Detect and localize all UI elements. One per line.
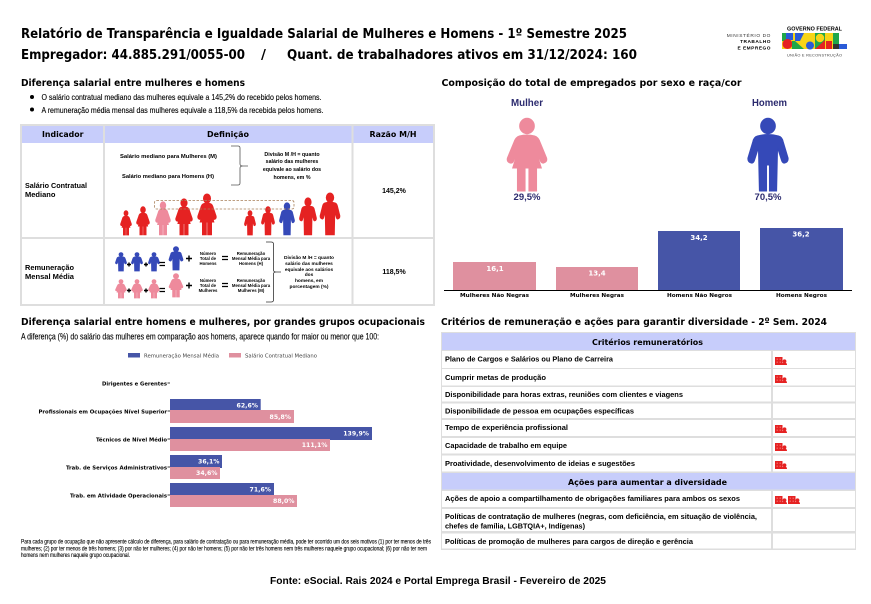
title: Quant. de trabalhadores ativos em 31/12/2024: 160 xyxy=(287,47,637,63)
table: indicadores: Remuneração xyxy=(25,263,74,272)
table: indicadores: Mediano xyxy=(25,190,56,199)
table: critérios e ações: Capacidade de trabalho em equipe xyxy=(445,441,567,450)
definition: remuneração média: salário das mulheres xyxy=(285,261,333,267)
heading: diferença salarial: Diferença salarial entre mulheres e homens xyxy=(21,78,245,89)
source: Fonte: eSocial. Rais 2024 e Portal Emprega Brasil - Fevereiro de 2025 xyxy=(270,575,606,587)
bar chart: sexo e raça/cor: Mulheres Negras xyxy=(570,293,625,299)
subtitle: A diferença (%) do salário das mulheres em comparação aos homens, aparece quando for maior ou menor que 100: xyxy=(21,332,379,342)
bar chart: sexo e raça/cor: 13,4 xyxy=(588,270,606,278)
definition: remuneração média: Mulheres (M) xyxy=(238,288,265,293)
table: critérios e ações: Ações de apoio a compartilhamento de obrigações familiares para ambos os sexos xyxy=(445,494,740,503)
definition: salário mediano: Salário mediano para Homens (H) xyxy=(122,174,214,180)
definition: remuneração média: Mulheres xyxy=(199,288,218,293)
table: critérios e ações: Políticas de promoção de mulheres para cargos de direção e gerência xyxy=(445,537,694,546)
definition: remuneração média: Número xyxy=(200,278,216,283)
logo: ministério e governo federal: MINISTÉRIO DO xyxy=(727,32,771,39)
legend: Remuneração Mensal Média xyxy=(144,352,219,360)
table: indicadores: 145,2% xyxy=(382,188,407,195)
legend xyxy=(128,352,318,360)
bar chart: sexo e raça/cor: Mulheres Não Negras xyxy=(460,293,530,299)
bar chart: sexo e raça/cor: Homens Não Negros xyxy=(667,293,733,299)
heading: critérios: Critérios de remuneração e ações para garantir diversidade - 2º Sem. 2024 xyxy=(441,316,827,328)
footnote: Para cada grupo de ocupação que não apresente cálculo de diferença, para salário de contratação ou para remuneração média, pode ter ocorrido um dos seis motivos (1) por ter menos de três xyxy=(21,540,431,546)
table: critérios e ações: Tempo de experiência profissional xyxy=(445,423,568,432)
bar chart: sexo e raça/cor: Homens Negros xyxy=(776,293,828,299)
title: Relatório de Transparência e Igualdade Salarial de Mulheres e Homens - 1º Semestre 2025 xyxy=(21,26,627,42)
definition: remuneração média: Homens xyxy=(200,261,217,266)
logo: ministério e governo federal: E EMPREGO xyxy=(737,46,771,52)
bar chart: grupos ocupacionais: 85,8% xyxy=(270,414,291,421)
definition: remuneração média: homens, em xyxy=(295,278,323,284)
logo: ministério e governo federal: UNIÃO E RECONSTRUÇÃO xyxy=(787,52,842,58)
icons: mulheres e homens em ordem de salário xyxy=(121,193,340,235)
table: critérios e ações: Proatividade, desenvolvimento de ideias e sugestões xyxy=(445,459,635,468)
legend: Salário Contratual Mediano xyxy=(245,352,318,360)
icons: empresa com critério adotado xyxy=(775,357,800,504)
icon: homem 70,5%: Homem xyxy=(752,98,787,109)
bar chart: grupos ocupacionais: 36,1% xyxy=(198,458,220,466)
table: indicadores xyxy=(20,124,435,306)
table: critérios e ações: Disponibilidade de pessoa em ocupações específicas xyxy=(445,406,634,416)
bar chart: grupos ocupacionais: 139,9% xyxy=(343,430,369,438)
definition: remuneração média: Total de xyxy=(200,283,217,288)
bar chart: grupos ocupacionais: 71,6% xyxy=(250,486,271,494)
logo: ministério e governo federal xyxy=(727,26,847,58)
table: indicadores: Salário Contratual xyxy=(25,181,87,190)
table: critérios e ações: Ações para aumentar a diversidade xyxy=(568,478,728,487)
bar chart: sexo e raça/cor: 34,2 xyxy=(690,234,708,242)
footnote xyxy=(21,540,431,559)
table: critérios e ações: Cumprir metas de produção xyxy=(445,373,547,382)
table: critérios e ações: chefes de família, LGBTQIA+, Indígenas) xyxy=(445,522,586,530)
table: indicadores: Razão M/H xyxy=(370,130,416,139)
table: critérios e ações: Plano de Cargos e Salários ou Plano de Carreira xyxy=(445,354,614,364)
icon: homem 70,5% xyxy=(748,98,788,203)
bar chart: sexo e raça/cor: 36,2 xyxy=(792,230,810,238)
bar chart: grupos ocupacionais xyxy=(38,382,372,507)
definition: salário mediano: homens, em % xyxy=(273,175,311,181)
bar chart: grupos ocupacionais: 34,6% xyxy=(196,470,218,477)
icon: mulher 29,5%: Mulher xyxy=(511,98,543,109)
bar chart: grupos ocupacionais: Trab. de Serviços Administrativos xyxy=(66,466,168,472)
title: / xyxy=(261,47,266,63)
bar chart: grupos ocupacionais: 88,0% xyxy=(273,498,294,505)
definition: remuneração média xyxy=(116,242,334,302)
table: critérios e ações: Políticas de contratação de mulheres (negras, com deficiência, em situação de violência, xyxy=(445,512,757,521)
footnote: mulheres; (2) por ter menos de três homens; (3) por não ter mulheres; (4) por não ter homens; (5) por não ter três homens nem três mulheres naquele grupo ocupacional; (6) por não ter nem xyxy=(21,546,427,552)
definition: remuneração média: porcentagem (%) xyxy=(290,284,329,290)
definition: salário mediano: salário das mulheres xyxy=(266,159,318,165)
definition: remuneração média: Divisão M /H = quanto xyxy=(284,255,334,261)
definition: remuneração média: Remuneração xyxy=(237,278,266,283)
definition: salário mediano: Salário mediano para Mulheres (M) xyxy=(120,154,217,160)
bar chart: sexo e raça/cor xyxy=(444,228,852,299)
definition: remuneração média: Remuneração xyxy=(237,251,266,256)
bar chart: sexo e raça/cor: 16,1 xyxy=(486,265,504,273)
table: indicadores: Mensal Média xyxy=(25,272,75,281)
table: indicadores: Definição xyxy=(207,130,249,139)
definition: salário mediano: equivale ao salário dos xyxy=(263,167,321,173)
table: indicadores: 118,5% xyxy=(382,269,406,276)
definition: salário mediano: Divisão M /H = quanto xyxy=(264,152,320,158)
definition: remuneração média: equivale aos salários xyxy=(285,267,333,273)
icon: mulher 29,5%: 29,5% xyxy=(514,192,541,203)
title xyxy=(21,26,637,63)
definition: remuneração média: Número xyxy=(200,251,216,256)
table: critérios e ações: Disponibilidade para horas extras, reuniões com clientes e viagens xyxy=(445,390,683,399)
table: critérios e ações xyxy=(441,332,856,550)
logo: ministério e governo federal: TRABALHO xyxy=(740,39,771,45)
footnote: homens nem mulheres naquele grupo ocupacional. xyxy=(21,553,130,559)
logo: ministério e governo federal: GOVERNO FEDERAL xyxy=(787,26,842,32)
heading: composição: Composição do total de empregados por sexo e raça/cor xyxy=(442,78,742,89)
definition: remuneração média: Homens (H) xyxy=(239,261,264,266)
bar chart: grupos ocupacionais: 62,6% xyxy=(237,402,258,410)
bar chart: grupos ocupacionais: Trab. em Atividade Operacionais xyxy=(70,494,168,500)
table: indicadores: Indicador xyxy=(42,130,84,139)
bar chart: grupos ocupacionais: 111,1% xyxy=(302,442,328,449)
bar chart: grupos ocupacionais: Profissionais em Ocupações Nível Superior xyxy=(38,408,167,416)
definition: remuneração média: Mensal Média para xyxy=(232,283,271,288)
bullet list xyxy=(30,92,324,115)
bar chart: grupos ocupacionais: Dirigentes e Gerentes xyxy=(102,382,168,388)
definition: remuneração média: dos xyxy=(305,272,314,278)
definition: remuneração média: Mensal Média para xyxy=(232,256,271,261)
definition: remuneração média: Total de xyxy=(200,256,217,261)
bullet list: A remuneração média mensal das mulheres equivale a 118,5% da recebida pelos homens. xyxy=(42,105,324,115)
bar chart: grupos ocupacionais: Técnicos de Nível Médio xyxy=(96,436,167,444)
bullet list: O salário contratual mediano das mulheres equivale a 145,2% do recebido pelos homens. xyxy=(42,92,322,102)
heading: grupos ocupacionais: Diferença salarial entre homens e mulheres, por grandes grupos ocupacionais xyxy=(21,317,425,328)
icon: mulher 29,5% xyxy=(507,98,547,203)
definition: salário mediano xyxy=(120,146,321,185)
table: critérios e ações: Critérios remuneratórios xyxy=(592,337,703,347)
title: Empregador: 44.885.291/0055-00 xyxy=(21,47,245,63)
icon: homem 70,5%: 70,5% xyxy=(755,192,782,203)
